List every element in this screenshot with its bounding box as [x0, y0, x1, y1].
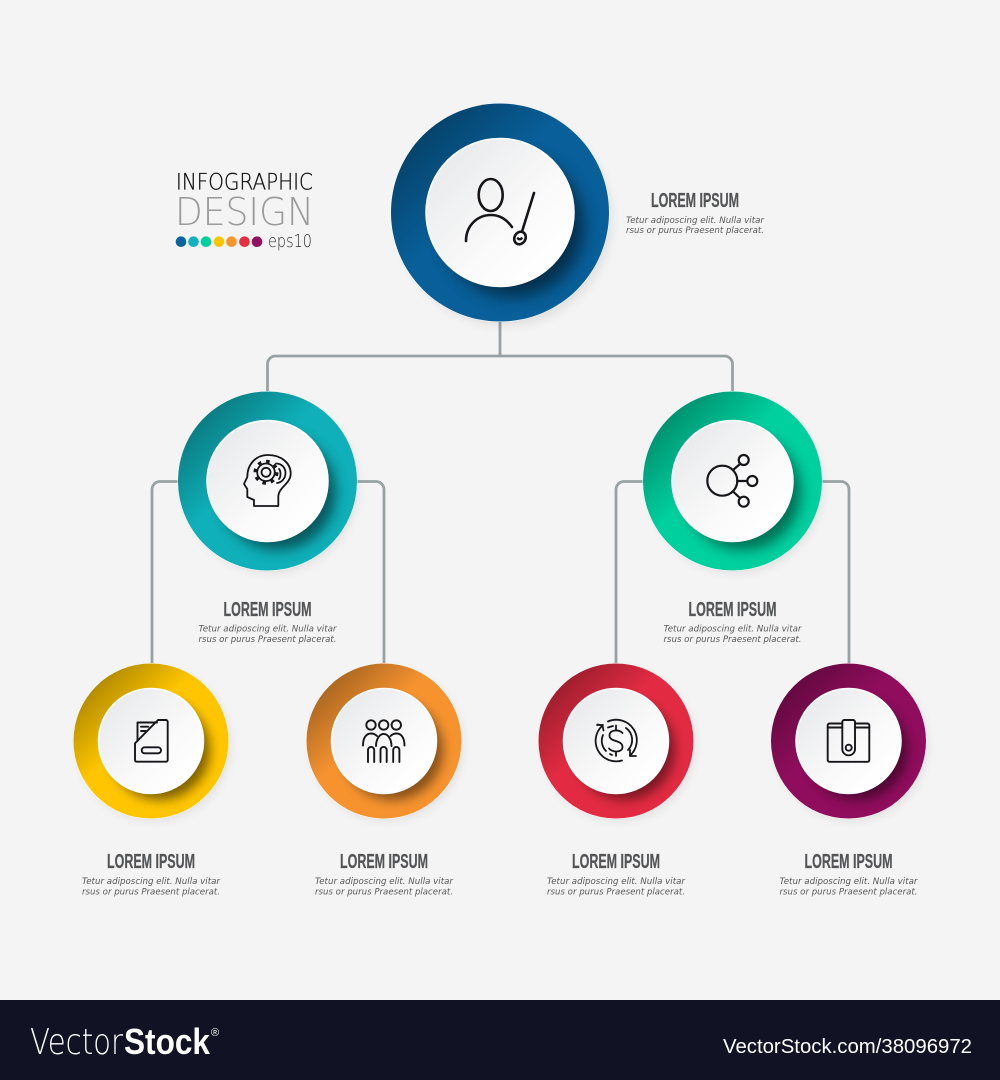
ring: green [642, 391, 823, 573]
text: orange node caption: rsus or purus Praesent placerat. [315, 888, 453, 898]
ring: purple [770, 663, 928, 821]
text: right middle node caption: rsus or purus Praesent placerat. [664, 635, 802, 645]
logo: infographic design [175, 170, 314, 252]
ring: yellow [73, 663, 230, 821]
ring: blue [390, 103, 612, 326]
panel: left middle node [178, 391, 358, 573]
heading: LOREM IPSUM [651, 189, 739, 212]
text: top node caption: rsus or purus Praesent placerat. [626, 226, 764, 236]
text: purple node caption [780, 850, 919, 898]
panel: purple node [770, 663, 928, 821]
body text: Tetur adiposcing elit. Nulla vitar [82, 877, 221, 887]
text: red node caption [547, 850, 686, 898]
panel: top node [390, 103, 612, 326]
body text: Tetur adiposcing elit. Nulla vitar [547, 877, 686, 887]
body text: Tetur adiposcing elit. Nulla vitar [198, 624, 338, 634]
text: purple node caption: rsus or purus Praesent placerat. [780, 888, 918, 898]
ring: red [538, 663, 695, 821]
text: red node caption: rsus or purus Praesent placerat. [547, 888, 685, 898]
inner disc [796, 688, 901, 794]
icon: wallet [828, 720, 869, 762]
logo word: eps10: eps10 [268, 231, 312, 252]
heading: LOREM IPSUM [340, 850, 428, 873]
registered mark: ® [211, 1027, 219, 1039]
connector lines [152, 318, 849, 666]
inner disc [98, 688, 204, 794]
icon: dollar exchange [596, 720, 637, 761]
ring: teal [178, 391, 358, 573]
panel: red node [538, 663, 695, 821]
panel: yellow node [73, 663, 230, 821]
inner disc [332, 688, 436, 794]
icon: person with pointer [466, 179, 534, 246]
text: left middle node caption [198, 598, 338, 645]
logo word: DESIGN: DESIGN [175, 190, 314, 234]
icon: head with gears [244, 455, 291, 506]
footer logo: Stock [124, 1021, 211, 1062]
footer id: VectorStock.com/38096972 [723, 1036, 972, 1058]
text: top node caption [626, 189, 765, 236]
heading: LOREM IPSUM [107, 850, 195, 873]
inner disc [426, 138, 574, 286]
heading: LOREM IPSUM [224, 598, 312, 621]
text: yellow node caption: rsus or purus Praesent placerat. [82, 888, 220, 898]
text: yellow node caption [82, 850, 221, 898]
panel: orange node [306, 663, 463, 821]
inner disc [564, 688, 668, 794]
footer logo [30, 1021, 211, 1063]
text: left middle node caption: rsus or purus Praesent placerat. [198, 635, 336, 645]
text: right middle node caption [664, 598, 803, 645]
body text: Tetur adiposcing elit. Nulla vitar [664, 624, 803, 634]
inner disc [207, 420, 328, 542]
logo word: INFOGRAPHIC: INFOGRAPHIC [176, 170, 313, 196]
icon: network nodes [707, 455, 757, 507]
footer logo: Vector [30, 1022, 123, 1063]
heading: LOREM IPSUM [572, 850, 660, 873]
inner disc [672, 420, 793, 542]
icon: folder with document [135, 720, 168, 762]
colour dots [176, 236, 262, 247]
footer bar [0, 1000, 1000, 1080]
heading: LOREM IPSUM [688, 598, 776, 621]
body text: Tetur adiposcing elit. Nulla vitar [780, 877, 919, 887]
body text: Tetur adiposcing elit. Nulla vitar [626, 216, 765, 226]
heading: LOREM IPSUM [804, 850, 892, 873]
text: orange node caption [315, 850, 454, 898]
body text: Tetur adiposcing elit. Nulla vitar [315, 877, 454, 887]
panel: right middle node [642, 391, 823, 573]
ring: orange [306, 663, 463, 821]
icon: group of people [363, 720, 404, 762]
